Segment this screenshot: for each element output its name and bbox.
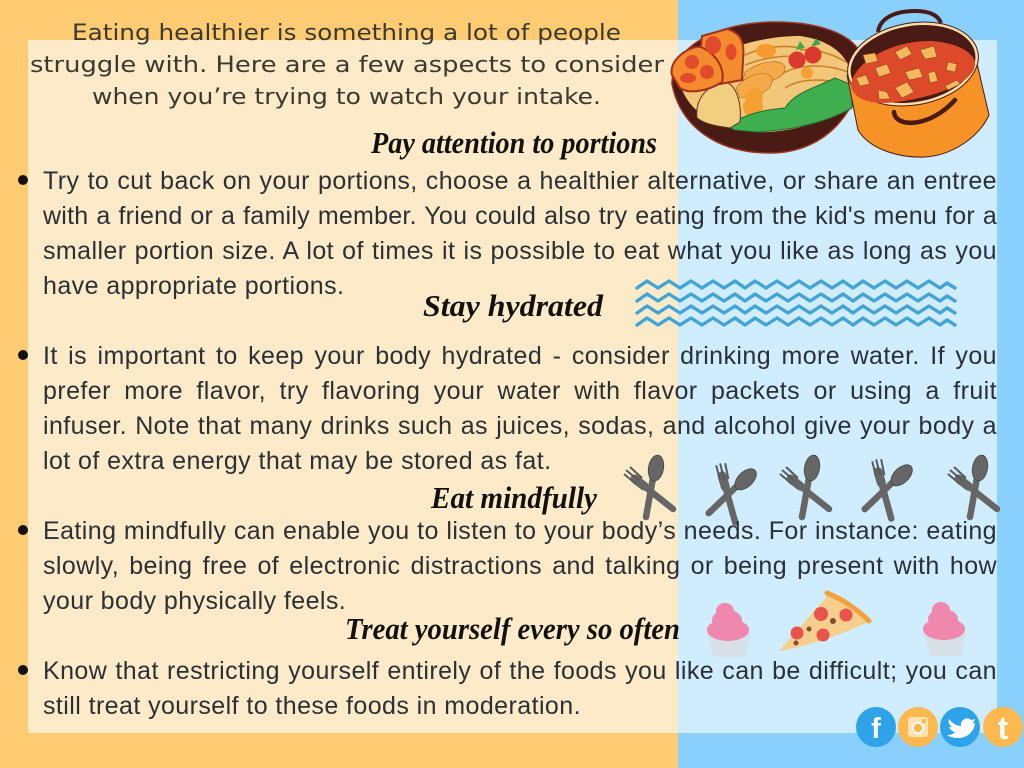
text block: mindful eating: slowly, being free of electronic distractions and talking or being present with how <box>43 552 997 580</box>
text block: portions: have appropriate portions. <box>43 272 344 300</box>
intro title: struggle with. Here are a few aspects to consider <box>30 53 665 78</box>
icon: tumblr: t <box>998 710 1009 746</box>
bullet <box>18 350 28 360</box>
intro title: when you’re trying to watch your intake. <box>92 85 601 110</box>
icon: orange pot of stew <box>841 11 989 157</box>
text block: portions: with a friend or a family member. You could also try eating from the kid's menu for a <box>43 202 997 230</box>
text block: hydration: It is important to keep your body hydrated - consider drinking more water. If you <box>43 342 997 370</box>
text block: portions: Try to cut back on your portions, choose a healthier alternative, or share an entree <box>43 167 997 195</box>
text block: mindful eating <box>43 517 997 615</box>
icon: water waves <box>637 281 955 325</box>
background: blue right side <box>678 0 1024 768</box>
text block: hydration: prefer more flavor, try flavoring your water with flavor packets or using a fruit <box>43 377 997 405</box>
text block: treats: still treat yourself to these foods in moderation. <box>43 692 581 720</box>
panel: cream left <box>28 40 678 733</box>
intro title <box>30 21 665 110</box>
heading: Eat mindfully: Eat mindfully <box>430 480 597 515</box>
panel: light blue right <box>678 40 997 733</box>
text block: hydration: lot of extra energy that may be stored as fat. <box>43 447 551 475</box>
icon: instagram <box>898 707 938 747</box>
bullet <box>18 175 28 185</box>
text block: mindful eating: Eating mindfully can enable you to listen to your body’s needs. For instance: eating <box>43 517 997 545</box>
icon: pizza slice <box>779 593 869 651</box>
icon: cupcake right <box>923 602 966 656</box>
icon: tumblr <box>983 707 1023 747</box>
text block: portions: smaller portion size. A lot of times it is possible to eat what you like as long as you <box>43 237 997 265</box>
icon: twitter <box>940 707 980 747</box>
background: orange left side <box>0 0 678 768</box>
text block: portions <box>43 167 997 300</box>
text block: treats: Know that restricting yourself entirely of the foods you like can be difficult; you can <box>43 657 997 685</box>
heading: Treat yourself every so often: Treat yourself every so often <box>345 611 680 646</box>
intro title: Eating healthier is something a lot of people <box>72 21 621 46</box>
heading: Stay hydrated: Stay hydrated <box>423 288 604 323</box>
icon: noodle bowl <box>672 22 862 153</box>
text block: treats <box>43 657 997 720</box>
heading: Pay attention to portions: Pay attention to portions <box>370 125 657 160</box>
text block: hydration <box>43 342 997 475</box>
text block: mindful eating: your body physically feels. <box>43 587 346 615</box>
icon: cupcake left <box>707 603 750 657</box>
icon: facebook: f <box>871 713 881 745</box>
icon: facebook <box>856 707 896 747</box>
text block: hydration: infuser. Note that many drinks such as juices, sodas, and alcohol give your body a <box>43 412 997 440</box>
bullet <box>18 525 28 535</box>
icon: cutlery row <box>624 445 997 529</box>
bullet <box>18 665 28 675</box>
